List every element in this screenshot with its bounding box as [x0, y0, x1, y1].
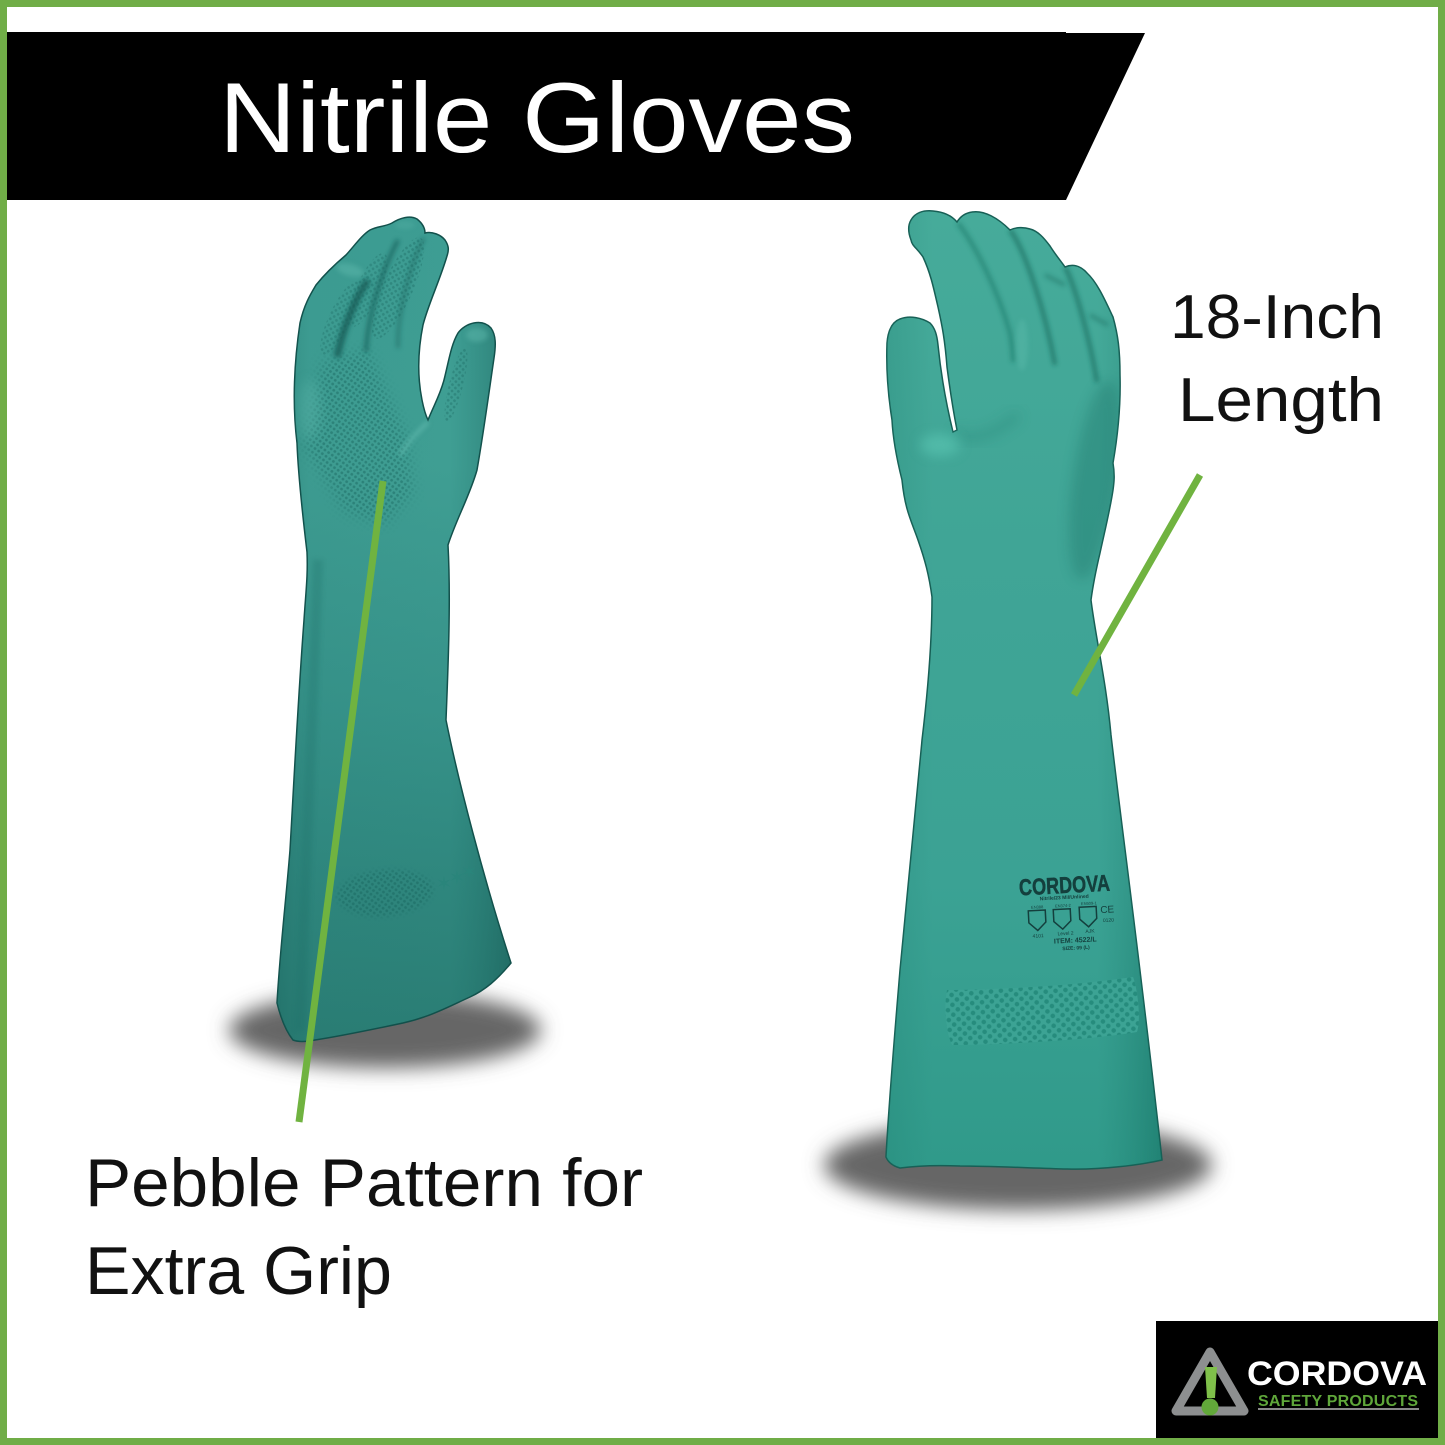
- icon: warning triangle: [1176, 1352, 1244, 1416]
- callout line: pebble pattern: [299, 481, 383, 1122]
- glove print: Cordova label: [1018, 869, 1117, 954]
- glove print: Cordova label: 4101: [1032, 933, 1044, 940]
- glove print: Cordova label: Nitrile/23 Mil/Unlined: [1040, 894, 1089, 902]
- glove print: Cordova label: EN374-2: [1055, 903, 1072, 909]
- callout text: 18-inch length: [1170, 283, 1384, 435]
- shadow: left glove: [229, 992, 541, 1068]
- glove: left, palm side: ✶: [449, 868, 465, 889]
- banner arrow tip: [1066, 33, 1145, 200]
- pebble patch and stars on cuff: [338, 870, 432, 916]
- callout text: pebble pattern: Pebble Pattern for: [85, 1145, 643, 1221]
- logo: Cordova Safety Products: [1156, 1321, 1439, 1438]
- glove print: Cordova label: 0120: [1103, 917, 1114, 924]
- callout text: 18-inch length: Length: [1178, 366, 1384, 435]
- glove print: Cordova label: EN388: [1031, 904, 1044, 910]
- finger creases: [337, 280, 368, 357]
- glove: left, palm side: ✶: [436, 874, 452, 895]
- glove print: Cordova label: Level 2: [1057, 931, 1074, 937]
- glove print: Cordova label: SIZE: 09 (L): [1062, 945, 1090, 952]
- glove print: Cordova label: ITEM: 4522/L: [1054, 936, 1098, 946]
- callout text: pebble pattern: Extra Grip: [85, 1233, 392, 1309]
- glove: left, palm side: ✶: [461, 862, 477, 883]
- glove print: Cordova label: EN509-1: [1081, 900, 1098, 906]
- logo: Cordova Safety Products: SAFETY PRODUCTS: [1258, 1393, 1418, 1410]
- callout line: length: [1074, 475, 1200, 695]
- finger creases: [958, 223, 1013, 362]
- callout text: pebble pattern: [85, 1145, 643, 1309]
- shadow: right glove: [824, 1120, 1212, 1210]
- glove print: Cordova label: CE: [1100, 904, 1115, 916]
- glove print: Cordova label: AJK: [1085, 928, 1095, 935]
- title banner: [7, 32, 1145, 200]
- title banner: Nitrile Gloves: [219, 62, 855, 173]
- logo: Cordova Safety Products: CORDOVA: [1247, 1355, 1427, 1393]
- callout text: 18-inch length: 18-Inch: [1170, 283, 1384, 352]
- glove: left, palm side: [270, 210, 520, 1050]
- glove: right, back side with Cordova print: [880, 205, 1170, 1175]
- glove print: Cordova label: CORDOVA: [1018, 870, 1111, 900]
